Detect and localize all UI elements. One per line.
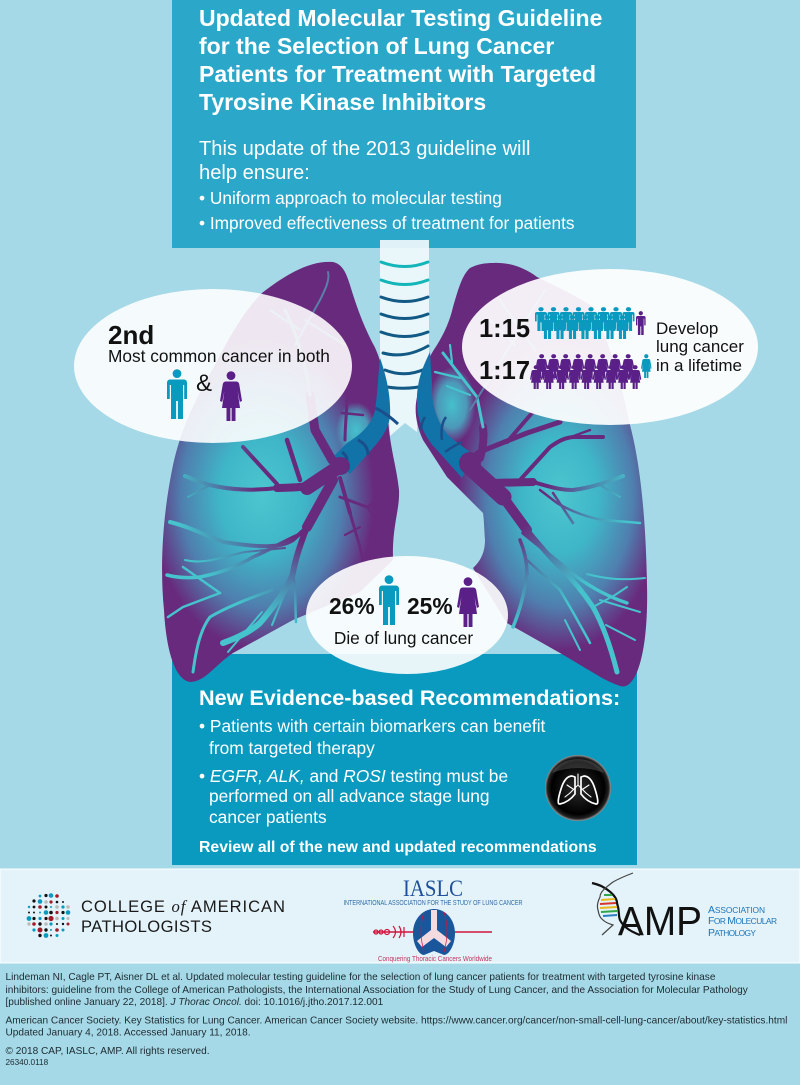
recommendation 2: cancer patients bbox=[209, 807, 327, 827]
caption: in a lifetime bbox=[656, 356, 742, 375]
logo wordmark: PATHOLOGISTS bbox=[81, 917, 212, 936]
callout: lifetime risk bbox=[462, 269, 758, 425]
women pictogram row bbox=[530, 354, 652, 389]
copyright: © 2018 CAP, IASLC, AMP. All rights reserved. bbox=[6, 1046, 210, 1057]
AMP letters: AMP bbox=[618, 898, 702, 944]
men pictogram row bbox=[535, 307, 646, 339]
references bbox=[6, 972, 787, 1067]
ampersand: & bbox=[196, 370, 212, 397]
icon: lung button bbox=[545, 755, 611, 821]
caption: lung cancer bbox=[656, 337, 744, 356]
tagline: Conquering Thoracic Cancers Worldwide bbox=[378, 954, 492, 963]
association name bbox=[708, 904, 777, 939]
ratio: 1 in 15: 1:15 bbox=[479, 315, 530, 343]
association name: PATHOLOGY bbox=[708, 927, 756, 939]
left lung hub bbox=[330, 457, 350, 475]
statistic: 25 percent: 25% bbox=[407, 593, 453, 619]
right bronchial tree bbox=[435, 290, 645, 672]
wordmark: IASLC bbox=[403, 876, 463, 901]
document number: 26340.0118 bbox=[6, 1058, 49, 1067]
icon: woman bbox=[220, 371, 242, 421]
right bronchus bbox=[417, 352, 474, 478]
citation 1: J Thorac Oncol. doi: 10.1016/j.jtho.2017.12.001 bbox=[170, 997, 383, 1008]
ratio: 1 in 17: 1:17 bbox=[479, 357, 530, 385]
trachea bbox=[380, 240, 429, 436]
title: Patients for Treatment with Targeted bbox=[199, 61, 596, 87]
recommendation 2: EGFR, ALK, and ROSI testing must be bbox=[210, 766, 508, 786]
icon: woman bbox=[457, 577, 479, 627]
caption: Most common cancer in both bbox=[108, 346, 330, 366]
caption: Die of lung cancer bbox=[334, 628, 473, 648]
intro text: help ensure: bbox=[199, 162, 310, 184]
logo: College of American Pathologists bbox=[27, 893, 285, 938]
icon: man bbox=[167, 369, 187, 419]
logo wordmark: COLLEGE of AMERICAN bbox=[81, 897, 285, 916]
caption: Develop bbox=[656, 319, 718, 338]
intro text: This update of the 2013 guideline will bbox=[199, 138, 530, 160]
citation 2: Updated January 4, 2018. Accessed January 11, 2018. bbox=[6, 1028, 251, 1038]
right lung bbox=[416, 263, 647, 686]
logo: AMP bbox=[592, 873, 777, 944]
logo: IASLC bbox=[344, 876, 522, 963]
citation 1: inhibitors: guideline from the College of American Pathologists, the International Association for the Study of Lung Cancer, and the Association for Molecular Pathology bbox=[6, 985, 749, 996]
citation 2: American Cancer Society. Key Statistics for Lung Cancer. American Cancer Society website. https://www.cancer.org/cancer/non-small-cell-lung-cancer/about/key-statistics.html bbox=[6, 1016, 787, 1026]
heading: 2nd: 2nd bbox=[108, 320, 154, 350]
citation 1: [published online January 22, 2018]. bbox=[6, 997, 170, 1008]
association name: FOR MOLECULAR bbox=[708, 915, 777, 927]
panel: title header bbox=[172, 0, 636, 248]
logo wordmark bbox=[81, 897, 285, 936]
bullet list: • Improved effectiveness of treatment for patients bbox=[199, 213, 575, 233]
logo dots bbox=[27, 893, 70, 938]
bullet list: • Uniform approach to molecular testing bbox=[199, 188, 502, 208]
right lung hub bbox=[459, 452, 481, 474]
DNA helix bbox=[592, 873, 640, 935]
call to action: Review all of the new and updated recommendations bbox=[199, 839, 597, 856]
association name: ASSOCIATION bbox=[708, 904, 765, 916]
title: Tyrosine Kinase Inhibitors bbox=[199, 89, 486, 115]
recommendations text bbox=[199, 685, 620, 856]
statistic: 26 percent: 26% bbox=[329, 593, 375, 619]
left lung bbox=[162, 262, 399, 682]
heading: New Evidence-based Recommendations: bbox=[199, 685, 620, 710]
callout: second most common cancer bbox=[74, 289, 352, 443]
recommendation 2: • bbox=[199, 766, 210, 786]
recommendation 2: performed on all advance stage lung bbox=[209, 786, 490, 806]
icon: man bbox=[379, 575, 399, 625]
full name: INTERNATIONAL ASSOCIATION FOR THE STUDY OF LUNG CANCER bbox=[344, 898, 522, 907]
logo band bbox=[0, 869, 800, 963]
title: for the Selection of Lung Cancer bbox=[199, 33, 554, 59]
recommendation 1: • Patients with certain biomarkers can benefit bbox=[199, 716, 546, 736]
left bronchus bbox=[333, 358, 390, 474]
citation 1: Lindeman NI, Cagle PT, Aisner DL et al. Updated molecular testing guideline for the selection of lung cancer patients for treatment with targeted tyrosine kinase bbox=[6, 972, 716, 983]
left bronchial tree bbox=[167, 272, 395, 672]
panel: recommendations background bbox=[172, 654, 637, 865]
callout: mortality bbox=[306, 556, 508, 674]
recommendation 1: from targeted therapy bbox=[209, 738, 375, 758]
title: Updated Molecular Testing Guideline bbox=[199, 5, 602, 31]
emblem bbox=[373, 909, 492, 955]
